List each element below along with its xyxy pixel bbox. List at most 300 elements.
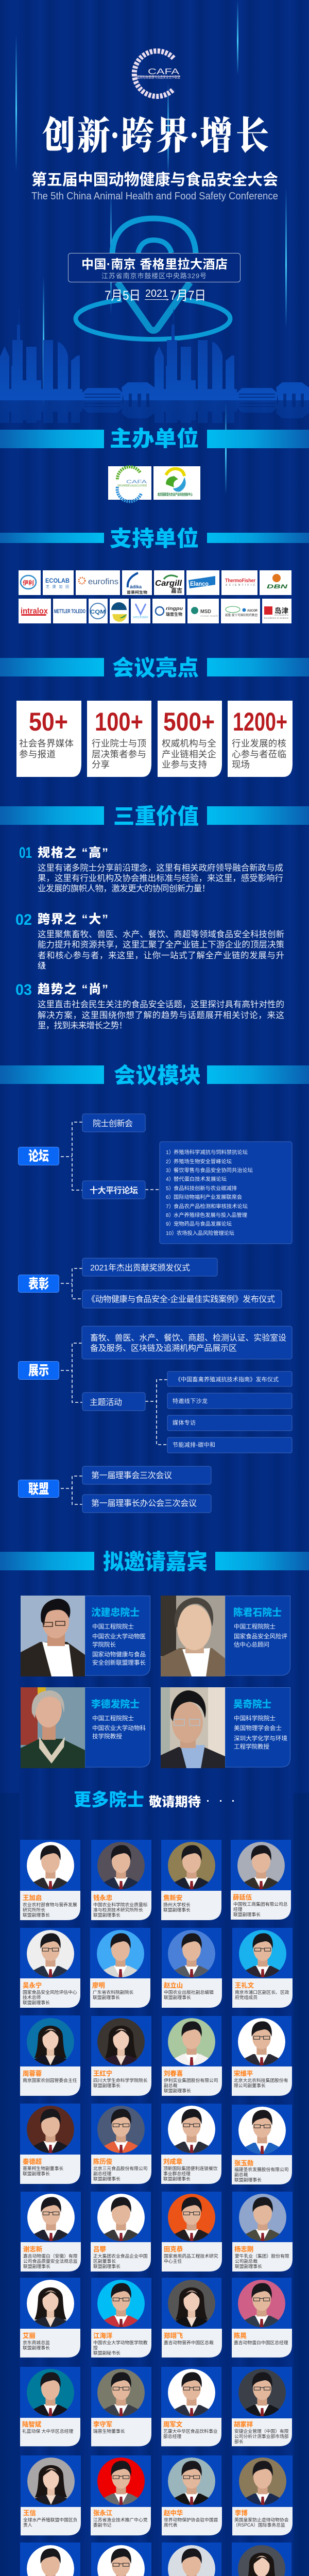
speaker card: 钱永忠: 中国农业科学院农业质量标 bbox=[93, 1902, 148, 1907]
speaker card: 周军文: 周军文 bbox=[163, 2420, 183, 2428]
logo: Thermo Fisher: S C I E N T I F I C bbox=[226, 584, 255, 587]
stat card: 1200+: 心参与者莅临 bbox=[232, 749, 286, 759]
speaker card: 王加启: 王加启 bbox=[23, 1894, 42, 1902]
stat card: 50+: 50+ bbox=[29, 707, 68, 736]
speaker card: 廖明: 广东省农科院副院长 bbox=[93, 1989, 133, 1995]
academician card: 吴奇 bbox=[161, 1687, 290, 1768]
box: exhibition zones bbox=[82, 1326, 292, 1359]
photo bbox=[161, 1687, 225, 1768]
hero: venue box bbox=[68, 253, 240, 282]
logo: intralox: intralox bbox=[21, 607, 48, 616]
stat card: 100+: 分享 bbox=[92, 759, 110, 770]
speaker card: 艾丽: 艾丽 bbox=[23, 2332, 36, 2340]
academician card: 陈君石: 陈君石院士 bbox=[233, 1606, 282, 1618]
speaker card: 陈历俊 bbox=[91, 2104, 151, 2184]
speaker card: 王加启 bbox=[20, 1840, 80, 1920]
value 03: 解决方案，这里围绕你想了解的趋势与话题展开相关讨论，来这 bbox=[38, 1010, 284, 1020]
value 02: 02 bbox=[15, 911, 32, 928]
academician card: 沈建忠: 学院院长 bbox=[92, 1641, 116, 1648]
speaker card: 赵立山: 中国农业出版社副总编辑 bbox=[164, 1989, 214, 1995]
box: 主题活动: 主题活动 bbox=[90, 1398, 122, 1407]
logo: vetoquinol ASCOR bbox=[221, 599, 260, 623]
value 03 bbox=[15, 981, 284, 1030]
photo bbox=[21, 1596, 85, 1676]
box: council meeting bbox=[82, 1466, 211, 1484]
speaker card: 吕攀 bbox=[91, 2192, 151, 2272]
heading: 支持单位 bbox=[0, 527, 309, 551]
stat card: 50+: 社会各界媒体 bbox=[19, 738, 74, 749]
panel: ten parallel forums: 1） bbox=[166, 1149, 174, 1156]
value 02: 这里聚焦畜牧、兽医、水产、餐饮、商超等领域食品安全科技创新 bbox=[38, 929, 284, 939]
value 01 bbox=[19, 844, 283, 893]
speaker card: 王礼文: 府党组成员 bbox=[235, 1994, 258, 2000]
stat card: 100+ bbox=[87, 701, 151, 777]
academician card: 陈君石 bbox=[161, 1596, 290, 1676]
academician card: 吴奇: 工程学院教授 bbox=[234, 1743, 269, 1750]
speaker card: 薛廷伍: 联盟副理事长 bbox=[233, 1911, 261, 1917]
speaker card: 廖明: 联盟副理事长 bbox=[93, 1994, 120, 2000]
speaker card: 郑翊飞: 嘉吉动物营养中国区总裁 bbox=[164, 2340, 214, 2345]
heading: 更多院士 敬请期待 bbox=[74, 1790, 234, 1810]
speaker card: 李博 bbox=[232, 2455, 293, 2535]
speaker card: 陆智斌: 陆智斌 bbox=[22, 2420, 42, 2428]
logo: vetoquinol ASCOR: 威隆·爱士可国际制药集团 bbox=[225, 613, 258, 617]
panel: ten parallel forums: 替代蛋白技术发展论坛 bbox=[174, 1176, 227, 1182]
speaker card: 杨志刚: 杨志刚 bbox=[234, 2245, 253, 2253]
box: best practices release: 《动物健康与食品安全-企业最佳实践案例》发布仪式 bbox=[87, 1295, 275, 1304]
box: award ceremony bbox=[82, 1258, 217, 1276]
speaker card: 谢志新 bbox=[21, 2192, 81, 2272]
speaker card: 赵立山: 联盟副理事长 bbox=[164, 1994, 191, 2000]
hero: dates: 7月7日 bbox=[170, 289, 206, 303]
panel: ten parallel forums: 2） bbox=[166, 1159, 174, 1165]
speaker card: 刘成章: 联盟副理事长 bbox=[163, 2176, 191, 2181]
speaker card: 田克恭: 国家兽用药品工程技术研究 bbox=[164, 2253, 218, 2259]
logo: MSD: Animal Health bbox=[200, 615, 218, 617]
speaker card: 周蓉蓉: 南京国家农创园管委会主任 bbox=[23, 2077, 77, 2083]
speaker card: 周军文 bbox=[161, 2367, 221, 2446]
speaker card: 吕攀: 正大集团农业食品企业中国 bbox=[93, 2253, 148, 2259]
speaker card: 胡家祥: 安捷企业管理（中国）有限 bbox=[234, 2428, 289, 2434]
speaker card: 秦德超: 秦德超 bbox=[23, 2158, 42, 2165]
box: exhibition zones: 备及服务、区块链及追溯机构产品展示区 bbox=[90, 1344, 237, 1353]
speaker card: 赵立山: 赵立山 bbox=[164, 1981, 183, 1989]
speaker card: 刘成章: 刘成章 bbox=[163, 2158, 182, 2165]
academician card: 吴奇: 美国物理学会会士 bbox=[234, 1724, 282, 1732]
logo: 岛津 bbox=[262, 599, 291, 623]
speaker card: 艾丽: 京东商城总监 bbox=[23, 2340, 50, 2345]
academician card: 沈建忠: 国家动物健康与食品 bbox=[92, 1651, 146, 1658]
value 01: 规格之 “高” bbox=[38, 845, 108, 860]
logo: ECOLAB bbox=[43, 570, 74, 595]
panel: ten parallel forums: 4） bbox=[166, 1176, 174, 1182]
heading: 会议亮点: 会议亮点 bbox=[112, 656, 199, 680]
speaker card: Steve McIvor bbox=[162, 2543, 222, 2576]
stat card: 500+: 业参与支持 bbox=[162, 759, 207, 770]
speaker card: 李守军 bbox=[91, 2367, 151, 2446]
speaker card: 吕攀: 吕攀 bbox=[93, 2245, 106, 2253]
speaker card: 吴永宁: 联盟副理事长 bbox=[23, 1999, 50, 2005]
logo: ECOLAB: ECOLAB bbox=[45, 577, 70, 584]
panel: ten parallel forums: 农场投入品风险管理论坛 bbox=[177, 1230, 234, 1236]
logo: round emblem bbox=[110, 599, 129, 623]
speaker card: 焦新安 bbox=[161, 1840, 221, 1920]
speaker card: 谢志新: 联盟副理事长 bbox=[23, 2263, 50, 2269]
logo: DBN: DBN bbox=[267, 584, 288, 590]
organiser logo: innovation centre: 南京国家现代农业产业科技创新中心 bbox=[158, 492, 193, 497]
speaker card: 吴永宁: 吴永宁 bbox=[23, 1981, 42, 1989]
panel: ten parallel forums: 7） bbox=[166, 1204, 174, 1210]
hero: calligraphy slogan: 增 bbox=[200, 106, 233, 160]
speaker card: 张永江: 委副书记 bbox=[93, 2522, 111, 2528]
value 01: 01 bbox=[19, 844, 32, 861]
speaker card: 赵中华: 席代表 bbox=[164, 2522, 178, 2528]
hero: English title: The 5th China Animal Health and Food Safety Conference bbox=[31, 191, 278, 202]
speaker card: 赵中华: 赵中华 bbox=[164, 2509, 183, 2517]
speaker card: 秦德超 bbox=[20, 2104, 80, 2184]
speaker card: 周蓉蓉 bbox=[20, 2015, 80, 2096]
organiser logo: CAFA: 国际动物健康与食品安全合作联盟 bbox=[117, 484, 147, 487]
value 02: 跨界之 “大” bbox=[38, 912, 108, 926]
speaker card: 张永江 bbox=[91, 2455, 151, 2535]
logo: 岛津: SHIMADZU bbox=[274, 614, 288, 616]
box: 主题活动 bbox=[82, 1393, 145, 1411]
speaker card: 刘春喜: 伊利实业集团股份有限公司 bbox=[164, 2077, 218, 2083]
box: chair office meeting bbox=[82, 1495, 211, 1513]
hero: dates: 7月5日 bbox=[105, 289, 141, 303]
logo: eurofins: eurofins bbox=[88, 578, 118, 586]
speaker card: 田克恭: 田克恭 bbox=[164, 2245, 183, 2253]
logo: Thermo Fisher bbox=[221, 570, 258, 595]
sponsor logos row 1 bbox=[19, 570, 291, 595]
speaker card: 钱永忠: 钱永忠 bbox=[93, 1894, 113, 1902]
speaker card: 刘春喜 bbox=[162, 2016, 222, 2096]
speaker card: 杨志刚: 蒙牛乳业（集团）股份有限 bbox=[235, 2253, 289, 2259]
hero: logo CAFA: 国际动物健康与食品安全合作联盟 bbox=[137, 75, 180, 79]
speaker card: 胡家祥 bbox=[232, 2367, 292, 2446]
speaker card: 艾丽: 联盟副理事长 bbox=[23, 2345, 50, 2350]
box: 院士创新会 bbox=[82, 1114, 145, 1132]
speaker card: 王礼文: 南京市浦口区副区长、区政 bbox=[235, 1989, 289, 1995]
speaker card: 吴永宁: 技术总师 bbox=[23, 1994, 41, 2000]
logo: MSD bbox=[187, 599, 219, 623]
heading: 更多院士 敬请期待: 更多院士 bbox=[74, 1790, 144, 1810]
value 03: 03 bbox=[15, 981, 32, 998]
speaker card: 江海洋: 授 bbox=[93, 2345, 98, 2350]
academician card: 李德发: 技学院教授 bbox=[92, 1733, 122, 1740]
logo: 伊利 bbox=[19, 570, 41, 595]
panel: ten parallel forums: 养殖场生物安全冒峰论坛 bbox=[174, 1158, 232, 1165]
box: 院士创新会: 院士创新会 bbox=[93, 1119, 133, 1128]
speaker card: 江海洋 bbox=[91, 2278, 151, 2358]
speaker card: 江海洋: 中国农业大学动物医学院教 bbox=[93, 2340, 148, 2345]
hero: venue box: 江苏省南京市鼓楼区中央路329号 bbox=[101, 272, 207, 280]
module: 表彰: 表彰 bbox=[28, 1276, 49, 1292]
panel: ten parallel forums: 3） bbox=[166, 1167, 174, 1174]
logo: swirl biotech bbox=[122, 570, 152, 595]
speaker card: 钱永忠 bbox=[91, 1840, 151, 1920]
hero: logo CAFA bbox=[132, 51, 180, 96]
speaker card: 吕攀: 区副董事长 bbox=[93, 2258, 116, 2264]
photo bbox=[21, 1687, 85, 1768]
academician card: 陈君石: 中国工程院院士 bbox=[234, 1623, 276, 1630]
panel: ten parallel forums: 宠物药品与食品发展论坛 bbox=[174, 1221, 232, 1227]
logo: swirl biotech: ádika bbox=[130, 584, 142, 589]
speaker card: 薛廷伍: 经理 bbox=[233, 1906, 243, 1912]
speaker card: 李博: 李博 bbox=[235, 2509, 248, 2517]
speaker card: 艾丽 bbox=[20, 2278, 80, 2358]
box: council meeting: 第一届理事会三次会议 bbox=[91, 1471, 172, 1480]
speaker card: 宋维平 bbox=[232, 2016, 292, 2096]
heading: 三重价值: 三重价值 bbox=[113, 804, 199, 828]
academician card: 沈建忠: 中国农业大学动物医 bbox=[92, 1633, 146, 1640]
speaker card: 王礼文: 王礼文 bbox=[235, 1981, 254, 1989]
hero: calligraphy slogan bbox=[42, 106, 269, 160]
speaker card: 刘春喜: 刘春喜 bbox=[164, 2070, 183, 2077]
module: 展示 bbox=[19, 1326, 292, 1453]
panel: ten parallel forums: 食品农产品检测和审核技术论坛 bbox=[174, 1203, 248, 1210]
speaker card: 陈晃 bbox=[232, 2278, 292, 2358]
panel: ten parallel forums: 餐饮零售与食品安全协同共治论坛 bbox=[174, 1167, 253, 1174]
box: media interview: 媒体专访 bbox=[173, 1419, 196, 1426]
panel: ten parallel forums: 8） bbox=[166, 1212, 174, 1218]
value 01: 果，这里有行业机构及协会推出标准与经验，来这里，感受影响行 bbox=[38, 873, 283, 883]
heading: 拟邀请嘉宾 bbox=[0, 1550, 309, 1574]
box: salon bbox=[167, 1393, 292, 1409]
stat card: 50+ bbox=[16, 701, 81, 777]
logo: vechain: vechain bbox=[133, 616, 148, 619]
speaker card: 邹小红 bbox=[232, 2543, 292, 2576]
speaker card: 陈历俊: 陈历俊 bbox=[93, 2158, 113, 2165]
stat card: 1200+: 行业发展的核 bbox=[232, 738, 286, 749]
speaker card: 陆智斌: 礼蓝动保 大中华区总经理 bbox=[22, 2428, 73, 2434]
stat card: 100+: 行业院士与顶 bbox=[92, 738, 146, 749]
value 02: 者和核心参与者，来这里，让你一站式了解全产业链的发展与升 bbox=[38, 951, 284, 960]
stat card: 100+: 100+ bbox=[95, 707, 143, 736]
value 02 bbox=[15, 911, 284, 971]
hero: venue box: 中国·南京 香格里拉大酒店 bbox=[81, 257, 228, 272]
value 01: 这里有诸多院士分享前沿理念，这里有相关政府领导融合新政与成 bbox=[38, 862, 283, 873]
speaker card: 张玉勋 bbox=[232, 2105, 292, 2184]
speaker card: 王红宁: 联盟副理事长 bbox=[93, 2082, 121, 2088]
stat card: 500+: 产业链相关企 bbox=[162, 749, 216, 759]
speaker card: 江海洋: 江海洋 bbox=[93, 2332, 113, 2340]
speaker card: 杨志刚 bbox=[232, 2192, 293, 2272]
academician card: 李德发: 中国工程院院士 bbox=[92, 1715, 134, 1722]
speaker card: 廖明 bbox=[90, 1928, 150, 2008]
speaker card: 陈历俊: 联盟副理事长 bbox=[93, 2176, 121, 2181]
value 02: 级！ bbox=[38, 961, 50, 971]
speaker card: 张永江: 江苏省渔业技术推广中心党 bbox=[93, 2517, 148, 2522]
box: exhibition zones: 畜牧、兽医、水产、餐饮、商超、检测认证、实验室设 bbox=[90, 1333, 286, 1343]
speaker card: 王红宁 bbox=[91, 2016, 151, 2096]
logo: METTLER TOLEDO: METTLER TOLEDO bbox=[54, 608, 85, 615]
module: 论坛: 论坛 bbox=[28, 1148, 49, 1164]
speaker card: 王信: 责人 bbox=[23, 2522, 32, 2528]
speaker card: 陆智斌 bbox=[20, 2367, 80, 2446]
stat card: 500+: 500+ bbox=[163, 707, 215, 736]
value 02: 能力提升和资源共享，这里汇聚了全产业链上下游企业的顶层决策 bbox=[38, 940, 284, 950]
academician card: 吴奇: 中国科学院院士 bbox=[234, 1715, 276, 1722]
heading: 主办单位 bbox=[0, 427, 309, 451]
box: guideline release: 《中国畜禽养殖减抗技术指南》发布仪式 bbox=[175, 1376, 279, 1383]
logo: ECOLAB: 艺 康 加 田 bbox=[46, 584, 69, 589]
speaker card: 秦德超: 联盟副理事长 bbox=[23, 2171, 50, 2176]
value 03: 里，找到未来增长之势！ bbox=[38, 1021, 127, 1030]
heading: 更多院士 敬请期待: 敬请期待 bbox=[149, 1795, 201, 1809]
panel: ten parallel forums: 水产养殖绿色发展与投入品管理 bbox=[174, 1212, 247, 1218]
speaker card: 李守军: 瑞普生物董事长 bbox=[93, 2428, 125, 2434]
sponsor logos row 2 bbox=[19, 599, 291, 623]
speaker card: 张玉勋: 张玉勋 bbox=[234, 2159, 253, 2167]
academician card: 李德发: 李德发院士 bbox=[91, 1698, 140, 1710]
organiser logo: CAFA bbox=[108, 466, 151, 501]
academician card: 李德发: 中国农业大学动物科 bbox=[92, 1724, 146, 1732]
academician card: 沈建忠: 安全创新联盟理事长 bbox=[92, 1659, 146, 1666]
speaker card: 王礼文 bbox=[232, 1928, 293, 2008]
academician card: 沈建忠: 沈建忠院士 bbox=[91, 1606, 140, 1618]
hero: conference title: 第五届中国动物健康与食品安全大会 bbox=[31, 172, 278, 189]
speaker card: 李博: （RSPCA）国际事务总监 bbox=[233, 2522, 285, 2528]
module: 联盟 bbox=[19, 1466, 211, 1513]
hero: calligraphy slogan: 创 bbox=[42, 106, 75, 160]
stat card: 100+: 层决策者参与 bbox=[92, 749, 146, 759]
logo: CQM: CQM bbox=[90, 609, 106, 615]
speaker card: 周蓉蓉: 周蓉蓉 bbox=[23, 2070, 42, 2077]
panel: ten parallel forums: 10） bbox=[166, 1230, 177, 1236]
speaker card: 陈晃: 嘉吉动物蛋白中国区总经理 bbox=[234, 2340, 288, 2345]
panel: ten parallel forums: 5） bbox=[166, 1185, 174, 1192]
logo: ringpu: 瑞普生物 bbox=[166, 612, 182, 617]
module: 表彰 bbox=[19, 1258, 282, 1308]
box: award ceremony: 2021年杰出贡献奖颁发仪式 bbox=[90, 1263, 190, 1273]
speaker card: 赵中华 bbox=[162, 2455, 222, 2535]
hero: ring emblem bbox=[76, 218, 230, 340]
speaker card: 周军文: 艺康大中华区食品饮料事业 bbox=[163, 2428, 218, 2434]
speaker card: 王信: 王信 bbox=[23, 2509, 36, 2517]
speaker card: 周军文: 部总经理 bbox=[163, 2433, 181, 2439]
value 03: 趋势之 “尚” bbox=[38, 982, 108, 996]
speaker card: 吴永宁: 国家食品安全风险评估中心 bbox=[23, 1989, 77, 1995]
academician card: 沈建忠: 中国工程院院士 bbox=[92, 1623, 134, 1630]
hero: dates bbox=[105, 288, 206, 303]
box: media interview bbox=[167, 1415, 292, 1431]
speaker card: 张玉勋: 副总裁 bbox=[234, 2172, 248, 2177]
heading: 三重价值 bbox=[0, 804, 309, 828]
panel: ten parallel forums: 养殖场科学减抗与饲料禁抗论坛 bbox=[174, 1149, 248, 1156]
value 03: 这里直击社会民生关注的食品安全话题，这里探讨具有高针对性的 bbox=[38, 999, 284, 1009]
speaker card: 郑翊飞 bbox=[162, 2278, 222, 2358]
panel: ten parallel forums: 食品科技创新与农业碳减排 bbox=[174, 1185, 237, 1192]
speaker card: 陈历俊: 副总经理 bbox=[93, 2171, 111, 2176]
module: 展示: 展示 bbox=[28, 1363, 49, 1378]
organiser logo: innovation centre bbox=[153, 466, 200, 500]
box: 十大平行论坛: 十大平行论坛 bbox=[90, 1185, 138, 1195]
hero: calligraphy slogan: 长 bbox=[236, 106, 269, 160]
logo: Elanco: Elanco bbox=[190, 580, 209, 587]
logo: Cargill bbox=[154, 570, 184, 595]
speaker card: 胡家祥: 公司分析计测事业部市场部 bbox=[234, 2433, 289, 2439]
speaker card: 陈历俊: 北京三元食品股份有限公司 bbox=[93, 2165, 148, 2171]
speaker card: 江海洋: 联盟副秘书长 bbox=[93, 2350, 121, 2355]
logo: vetoquinol ASCOR: ASCOR bbox=[247, 609, 258, 613]
stat card: 1200+: 1200+ bbox=[233, 707, 287, 736]
box: carbon neutral bbox=[167, 1437, 292, 1453]
academician card: 吴奇: 吴奇院士 bbox=[233, 1698, 271, 1710]
box: 十大平行论坛 bbox=[82, 1181, 145, 1199]
logo: ringpu bbox=[152, 599, 185, 623]
logo: ringpu: ringpu bbox=[166, 606, 183, 611]
speaker card: 张永江: 张永江 bbox=[93, 2509, 113, 2517]
speaker card: 刘春喜: 联盟副理事长 bbox=[164, 2088, 191, 2093]
speaker card: 徐少山 bbox=[20, 2543, 80, 2576]
logo: Cargill: Cargill bbox=[155, 579, 182, 588]
speaker card: 刘成章: 事业群总经理 bbox=[163, 2171, 191, 2176]
speaker card: 吕攀: 联盟副理事长 bbox=[93, 2263, 121, 2269]
hero: calligraphy slogan: 跨 bbox=[121, 106, 154, 160]
speaker card: 王信 bbox=[21, 2455, 81, 2535]
speaker card: 刘春喜: 副总裁 bbox=[164, 2082, 178, 2088]
organiser logo: CAFA: CAFA bbox=[126, 479, 147, 484]
speaker card: 李守军: 李守军 bbox=[93, 2420, 112, 2428]
speaker card: 刘成章: 顶新国际集团便利连锁餐饮 bbox=[163, 2165, 218, 2171]
panel: ten parallel forums: 国际动物福利产业发展联席会 bbox=[174, 1194, 242, 1200]
logo: 岛津: 岛津 bbox=[274, 607, 288, 615]
academician card: 陈君石: 估中心总顾问 bbox=[234, 1641, 269, 1648]
speaker card: 张玉勋: 福建圣农发展股份有限公司 bbox=[234, 2166, 289, 2172]
hero: skyline bbox=[0, 309, 309, 423]
speaker card: 胡家祥: 部长 bbox=[234, 2438, 244, 2444]
speaker card: 李博: 英国皇家防止虐待动物协会 bbox=[234, 2517, 289, 2522]
logo: Cargill: 嘉吉 bbox=[171, 587, 182, 594]
speaker card: 胡家祥: 胡家祥 bbox=[234, 2420, 253, 2428]
speaker card: 熊传武 bbox=[91, 2543, 151, 2576]
speaker card: 杨志刚: 联盟副理事长 bbox=[235, 2263, 262, 2269]
speaker card: 钱永忠: 联盟副理事长 bbox=[93, 1912, 121, 1918]
photo bbox=[161, 1596, 225, 1676]
speaker card: 田克恭 bbox=[162, 2192, 222, 2272]
speaker card: 焦新安: 联盟副理事长 bbox=[163, 1907, 191, 1912]
speaker card: 王加启: 农业农村部食物与营养发展 bbox=[23, 1902, 77, 1907]
speaker card: 焦新安: 扬州大学校长 bbox=[163, 1902, 191, 1907]
logo: 岛津: Excellence in Science bbox=[264, 617, 288, 619]
hero: dates: 2021 bbox=[145, 288, 168, 299]
speaker card: 宋维平: 宋维平 bbox=[234, 2070, 253, 2077]
box: salon: 特邀线下沙龙 bbox=[173, 1397, 208, 1404]
speaker card: 廖明: 廖明 bbox=[92, 1981, 105, 1989]
heading: 支持单位: 支持单位 bbox=[110, 527, 199, 551]
value 01: 业发展的旗帜人物，激发更大的协同创新力量！ bbox=[38, 884, 210, 893]
stat card: 500+: 权威机构与全 bbox=[162, 738, 216, 749]
logo: MSD: MSD bbox=[200, 609, 211, 615]
speaker card: 王加启: 研究所所长 bbox=[23, 1907, 45, 1912]
speaker card: 秦德超: 普莱柯生物副董事长 bbox=[23, 2165, 63, 2171]
speaker card: 谢志新: 嘉吉动物蛋白（安徽）有限 bbox=[23, 2253, 78, 2259]
stat card: 1200+: 现场 bbox=[232, 759, 250, 770]
academician card: 陈君石: 国家食品安全风险评 bbox=[234, 1633, 287, 1640]
panel: ten parallel forums bbox=[160, 1142, 292, 1244]
speaker card: 赵中华: 世界动物保护协会驻中国首 bbox=[164, 2517, 218, 2522]
speaker card: 王红宁: 四川大学生命科学学院院长 bbox=[93, 2077, 148, 2083]
academician card: 沈建忠 bbox=[21, 1596, 150, 1676]
speaker card: 杨志刚: 公司副总裁 bbox=[235, 2258, 258, 2264]
speaker card: 宋维平: 限公司副董事长 bbox=[234, 2082, 266, 2088]
logo: METTLER TOLEDO bbox=[53, 599, 87, 623]
stat card: 50+: 参与报道 bbox=[19, 749, 56, 759]
speaker card: 王加启: 联盟副理事长 bbox=[23, 1912, 50, 1918]
speaker card: 钱永忠: 准与检测技术研究所所长 bbox=[93, 1907, 143, 1912]
speaker card: 刘成章 bbox=[161, 2104, 221, 2184]
